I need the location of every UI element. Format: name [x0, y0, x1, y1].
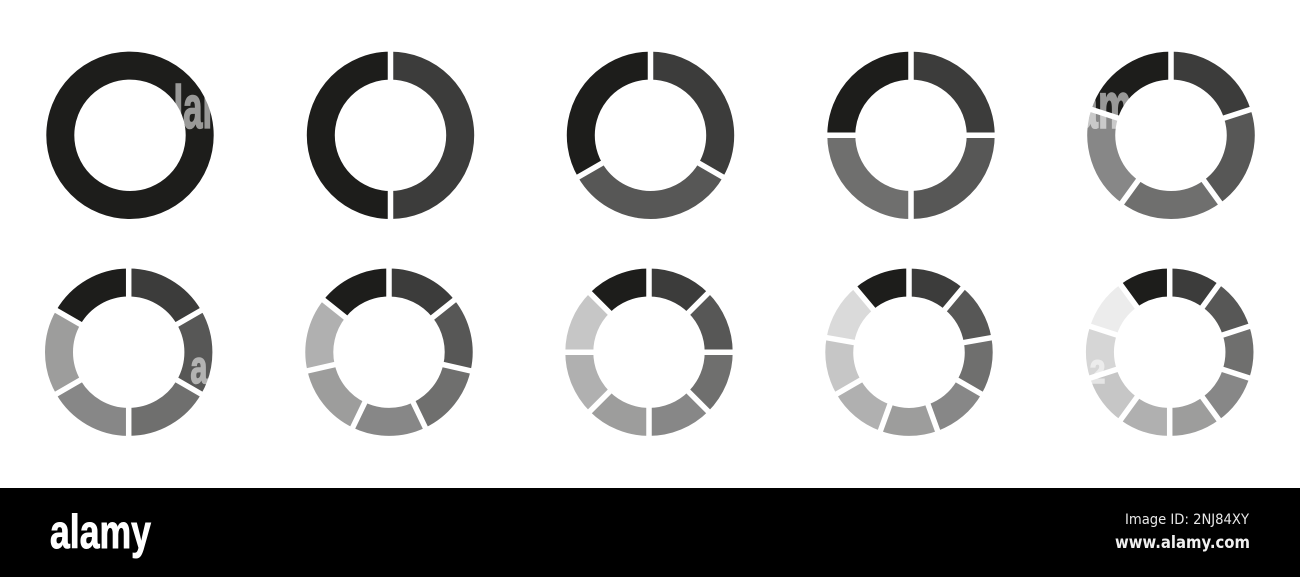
- donut: 4 segments: [823, 47, 999, 223]
- donut: 5 segments: [1074, 38, 1268, 233]
- watermark fragments: [174, 71, 1131, 394]
- donut: 10 segments: [1072, 255, 1267, 450]
- watermark fragments: am: [1077, 71, 1131, 143]
- watermark fragments: 2: [1090, 355, 1105, 391]
- donut: 6 segments: [33, 257, 224, 447]
- footer logo: alamy: alamy: [50, 505, 151, 558]
- donut: 1 segment: [60, 66, 200, 205]
- donut: 7 segments: [291, 254, 487, 450]
- footer bar: [0, 488, 1300, 577]
- donut: 8 segments: [550, 254, 748, 451]
- donut: 3 segments: [555, 40, 746, 231]
- website url: www.alamy.com: [1115, 533, 1250, 552]
- watermark fragments: a: [190, 343, 208, 394]
- donut: 9 segments: [811, 254, 1007, 450]
- donut: 2 segments: [321, 47, 460, 223]
- watermark fragments: lal: [174, 75, 212, 141]
- image id: Image ID: 2NJ84XY: [1125, 512, 1249, 528]
